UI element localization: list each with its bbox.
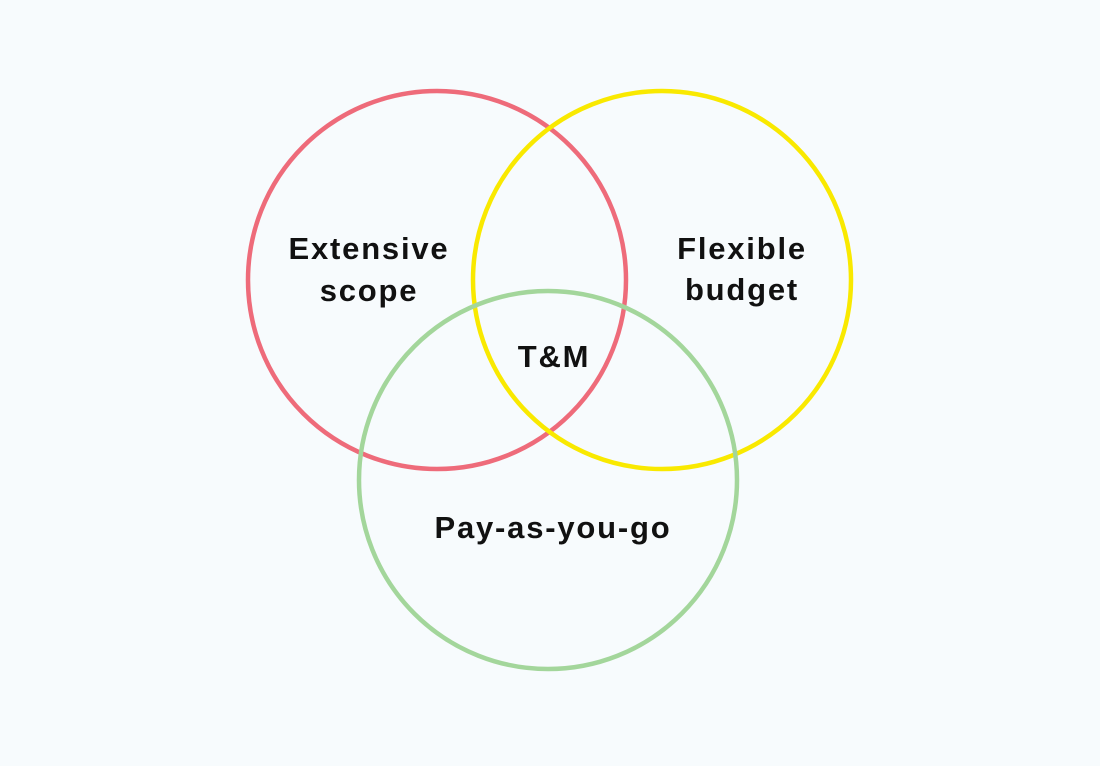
label: pay-as-you-go: Pay-as-you-go: [434, 510, 672, 545]
label: flexible budget: [677, 231, 807, 307]
circle: extensive scope: [248, 91, 626, 469]
label: extensive scope: scope: [320, 273, 418, 308]
label: extensive scope: [289, 231, 449, 308]
label: flexible budget: budget: [685, 272, 799, 307]
label: flexible budget: Flexible: [677, 231, 807, 266]
label: T&M center: T&M: [518, 339, 590, 374]
circle: pay-as-you-go: [359, 291, 737, 669]
circle: flexible budget: [473, 91, 851, 469]
label: extensive scope: Extensive: [289, 231, 449, 266]
